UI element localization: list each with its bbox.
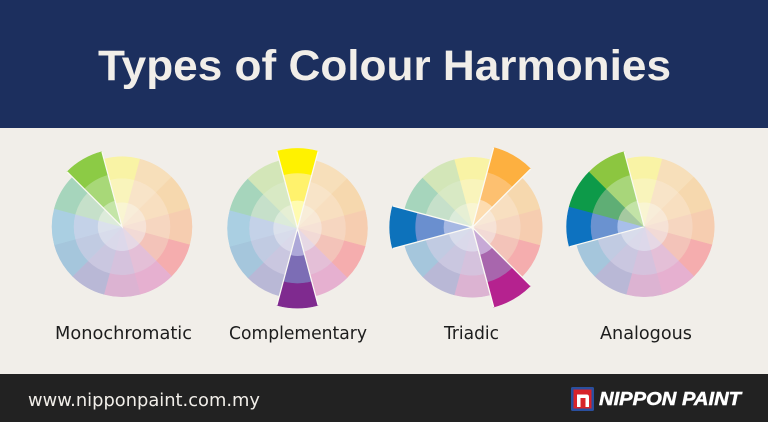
website address: www.nipponpaint.com.my bbox=[28, 391, 260, 411]
panel: complementary wheel bbox=[228, 149, 367, 308]
highlighted dark green sector bbox=[567, 170, 654, 244]
highlighted green sector bbox=[66, 149, 139, 237]
footer band bbox=[0, 374, 768, 422]
label: Triadic: Triadic bbox=[443, 323, 499, 344]
highlighted blue sector bbox=[567, 207, 644, 247]
title: Types of Colour Harmonies bbox=[98, 42, 671, 90]
header band bbox=[0, 0, 768, 128]
highlighted magenta sector bbox=[454, 217, 532, 310]
highlighted orange sector bbox=[454, 145, 532, 238]
icon: logo mark bbox=[571, 387, 594, 411]
panel: monochromatic wheel bbox=[52, 149, 192, 297]
panel: triadic wheel bbox=[390, 145, 542, 310]
highlighted yellow sector bbox=[277, 149, 318, 228]
label: Complementary: Complementary bbox=[229, 323, 367, 344]
logo wordmark: NIPPON PAINT bbox=[599, 388, 743, 409]
highlighted light green sector bbox=[588, 149, 662, 237]
panel: analogous wheel bbox=[567, 149, 714, 297]
logo: Nippon Paint bbox=[571, 387, 743, 411]
highlighted purple sector bbox=[277, 228, 318, 308]
label: Analogous: Analogous bbox=[600, 323, 692, 344]
label: Monochromatic: Monochromatic bbox=[55, 323, 192, 344]
highlighted blue sector bbox=[390, 206, 472, 249]
